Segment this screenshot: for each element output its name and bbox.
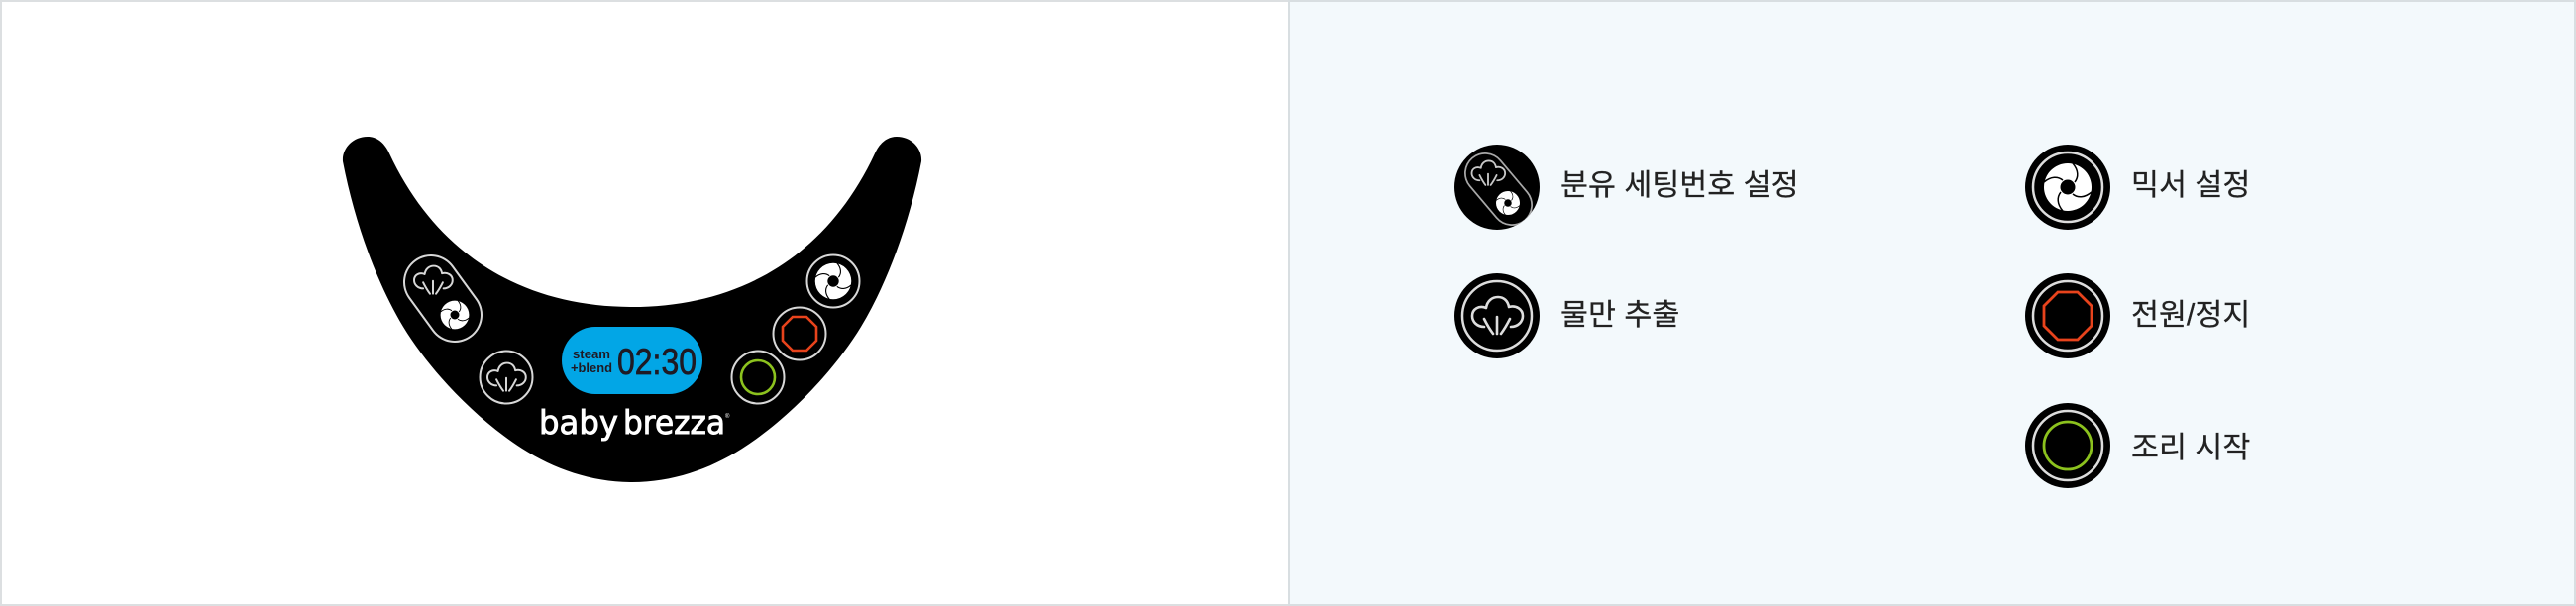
label: 분유 세팅번호 설정 [1560, 168, 1799, 202]
LCD display: steam [573, 347, 610, 361]
icon: start cooking [2025, 403, 2110, 488]
legend: mixer [2025, 145, 2250, 230]
LCD display [562, 327, 702, 394]
button: water only [480, 351, 533, 404]
icon: power stop [2025, 273, 2110, 358]
label: 전원/정지 [2131, 298, 2250, 332]
brand logo [539, 403, 730, 442]
label: 믹서 설정 [2131, 168, 2250, 202]
icon: mixer [2025, 145, 2110, 230]
button: power stop [773, 307, 826, 360]
legend: formula setting [1454, 145, 1799, 230]
brand logo: brezza [623, 403, 725, 442]
icon: water only [1454, 273, 1540, 358]
brand logo: baby [539, 403, 618, 442]
label: 물만 추출 [1560, 298, 1679, 332]
icon: formula setting [1454, 145, 1540, 230]
LCD display: 02:30 [617, 342, 697, 382]
button: start [731, 351, 785, 404]
panel: button legend (right) [1289, 1, 2575, 605]
button: formula setting pill [414, 266, 469, 329]
panel: device panel (left) [1, 1, 1289, 605]
brand logo: ® [725, 413, 730, 420]
legend: power stop [2025, 273, 2250, 358]
legend: start cooking [2025, 403, 2250, 488]
label: 조리 시작 [2131, 431, 2250, 464]
control panel illustration [343, 137, 921, 482]
black crescent panel [343, 137, 921, 482]
legend: water only [1454, 273, 1679, 358]
LCD display: +blend [571, 360, 612, 375]
button: mixer [806, 255, 860, 307]
